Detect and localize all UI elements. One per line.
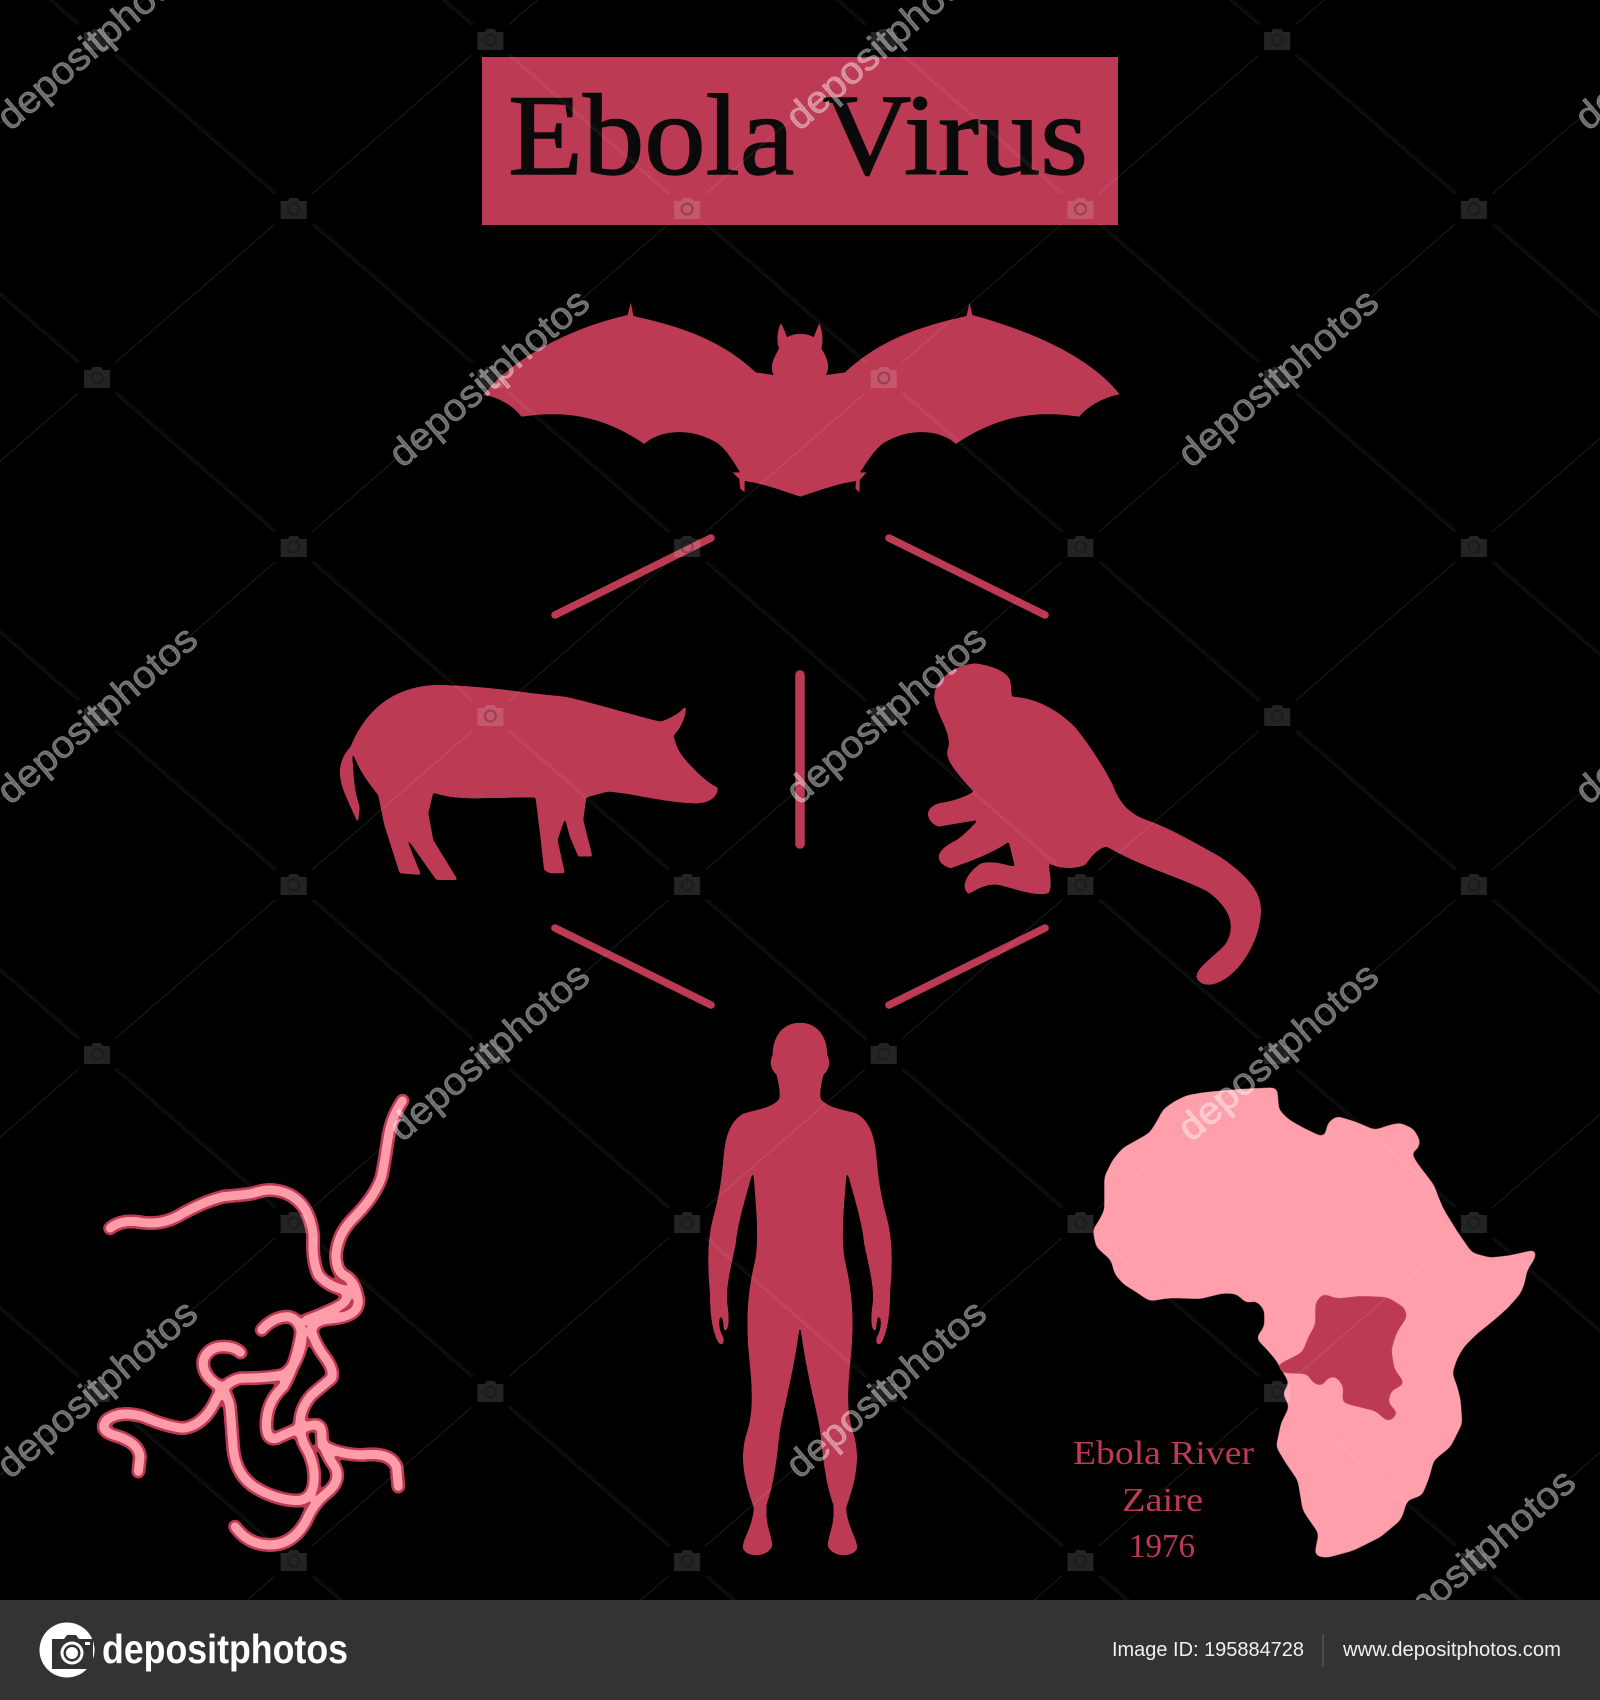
icon: human figure: [708, 1023, 892, 1555]
text: Ebola River, Zaire, 1976: Ebola River: [1073, 1435, 1255, 1472]
watermark: depositphotos text repeats: depositphotos: [1170, 281, 1387, 476]
icon: pig: [340, 685, 718, 880]
icon: ebola virus filaments: [104, 1101, 403, 1545]
text: Ebola River, Zaire, 1976: [1073, 1435, 1255, 1565]
text: image id: Image ID: 195884728: [1112, 1639, 1304, 1661]
watermark: depositphotos text repeats: depositphotos: [381, 281, 598, 476]
arrow: pig to human: [555, 928, 711, 1005]
icon: bat: [483, 303, 1120, 497]
watermark: depositphotos text repeats: depositphotos: [1170, 955, 1387, 1150]
title: Ebola Virus: [508, 72, 1088, 199]
map: Africa with Zaire highlighted: [1093, 1088, 1537, 1557]
text: website: www.depositphotos.com: [1342, 1639, 1561, 1661]
text: Ebola River, Zaire, 1976: Zaire: [1122, 1482, 1203, 1519]
text: logo wordmark: depositphotos: [102, 1626, 348, 1672]
arrow: pig to monkey: [795, 675, 805, 844]
watermark: depositphotos text repeats: depositphotos: [778, 618, 995, 813]
arrow: bat to monkey: [889, 538, 1045, 615]
watermark: depositphotos text repeats: depositphotos: [1367, 1461, 1584, 1656]
title: [482, 57, 1118, 225]
arrow: bat to pig: [555, 538, 711, 615]
arrow: monkey to human: [889, 928, 1045, 1005]
map: Africa continent: [1093, 1088, 1537, 1557]
watermark: depositphotos text repeats: depositphotos: [778, 1292, 995, 1487]
icon: depositphotos logo: [40, 1622, 94, 1678]
footer bar: [0, 1600, 1600, 1700]
watermark: depositphotos text repeats: depositphotos: [381, 955, 598, 1150]
text: Ebola River, Zaire, 1976: 1976: [1129, 1528, 1195, 1565]
map: Zaire region: [1278, 1295, 1406, 1421]
icon: monkey: [928, 663, 1261, 985]
